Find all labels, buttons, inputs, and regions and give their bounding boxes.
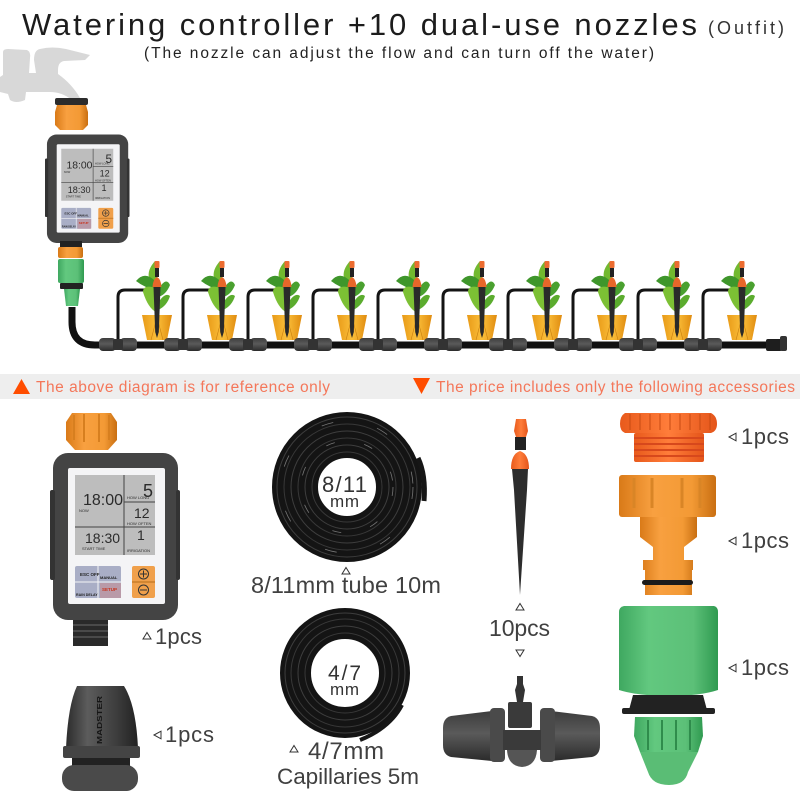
- label: coil small size: [328, 662, 361, 699]
- icon: up triangle: [13, 379, 30, 394]
- controller device: [45, 134, 130, 243]
- plant 2: [201, 261, 237, 340]
- label: coil inner size: [322, 472, 367, 511]
- part: end plug: MADSTER: [97, 696, 104, 744]
- label: 4/7mm capillaries: [277, 738, 419, 789]
- plant 7: [526, 261, 562, 340]
- plant 6: [461, 261, 497, 340]
- label: coil inner size: 8/11: [322, 472, 367, 497]
- right note: The price includes only the following accessories: [436, 379, 795, 396]
- label: green connector 1pcs: 1pcs: [741, 655, 789, 680]
- orange nut: [66, 413, 117, 450]
- label: coil small size: mm: [330, 680, 359, 699]
- main hose: [72, 307, 775, 345]
- plant 1: [136, 261, 172, 340]
- label: 8/11mm tube 10m: 8/11mm tube 10m: [251, 572, 441, 598]
- plant 10: [721, 261, 757, 340]
- capillary stems: [118, 290, 742, 345]
- plant 8: [591, 261, 627, 340]
- thread: [73, 619, 108, 646]
- tap connector orange: [55, 98, 88, 130]
- banner: [0, 374, 800, 399]
- icon: grey faucet silhouette: [0, 48, 90, 102]
- tee connectors: [99, 338, 722, 351]
- plant 5: [396, 261, 432, 340]
- hose connector: [58, 241, 84, 306]
- label: 10pcs: [489, 604, 550, 656]
- diagram: irrigation system: [45, 98, 787, 351]
- part: 4/7 capillary coil: [285, 613, 405, 740]
- part: tee connector: [443, 676, 600, 767]
- part: orange adaptor: [620, 413, 717, 462]
- title: (Outfit): [708, 18, 784, 38]
- end cap: [766, 336, 787, 351]
- label: adaptor 1pcs: 1pcs: [741, 424, 789, 449]
- label: coil small size: 4/7: [328, 662, 361, 685]
- plant 9: [656, 261, 692, 340]
- title: Watering controller +10 dual-use nozzles: [22, 7, 697, 42]
- part: green hose connector: [619, 606, 718, 785]
- label: plug 1pcs: 1pcs: [165, 722, 214, 747]
- part: timer device: [50, 413, 180, 646]
- label: connector 1pcs: 1pcs: [741, 528, 789, 553]
- plant 3: [266, 261, 302, 340]
- plant 4: [331, 261, 367, 340]
- label: 4/7mm capillaries: 4/7mm: [308, 738, 384, 765]
- subtitle: (The nozzle can adjust the flow and can turn off the water): [144, 45, 654, 62]
- label: timer 1pcs: 1pcs: [155, 624, 202, 649]
- part: end plug: [62, 686, 140, 791]
- label: 4/7mm capillaries: Capillaries 5m: [277, 764, 419, 789]
- label: coil inner size: mm: [330, 492, 359, 511]
- part: nozzle spike: [511, 419, 529, 595]
- part: orange tap connector: [619, 475, 716, 595]
- icon: down triangle: [413, 378, 430, 394]
- part: 8/11 tube coil: [277, 417, 424, 557]
- left note: The above diagram is for reference only: [36, 379, 330, 396]
- body: [50, 453, 180, 620]
- label: 10pcs: 10pcs: [489, 615, 550, 641]
